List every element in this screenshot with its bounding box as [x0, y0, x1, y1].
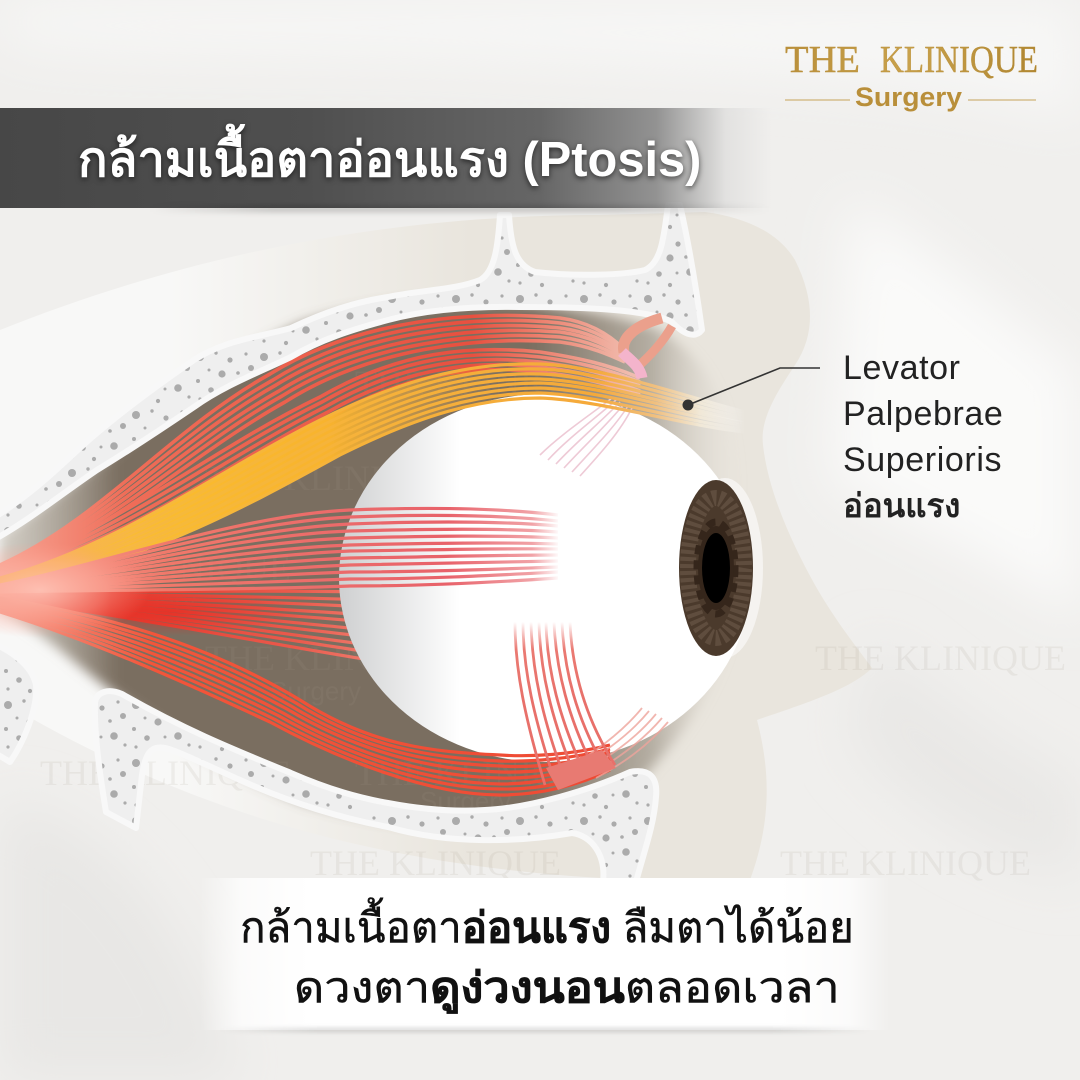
label: levator palpebrae superioris: Superioris — [843, 441, 1002, 479]
faint watermarks: Surgery — [420, 786, 511, 816]
caption text — [240, 897, 854, 1014]
faint watermarks: Surgery — [270, 676, 361, 706]
faint watermarks: THE KLINIQUE — [355, 753, 606, 793]
eyeball — [339, 394, 763, 762]
faint watermarks: THE KLINIQUE — [205, 458, 456, 498]
title: กล้ามเนื้อตาอ่อนแรง (Ptosis) — [78, 133, 701, 187]
faint watermarks: THE KLINIQUE — [40, 753, 291, 793]
logo: THE — [785, 39, 860, 81]
muscle: lower rectus behind the eye — [0, 591, 370, 660]
pupil — [702, 533, 730, 603]
logo: Surgery — [855, 82, 962, 112]
label: levator palpebrae superioris: Palpebrae — [843, 395, 1003, 433]
glow at muscle origin — [0, 542, 150, 638]
logo — [785, 39, 1038, 112]
faint watermarks: THE KLINIQUE — [310, 843, 561, 883]
faint watermarks — [40, 363, 1066, 883]
label: levator palpebrae superioris: Levator — [843, 349, 961, 387]
muscle: second superior band — [0, 350, 640, 578]
logo: KLINIQUE — [880, 39, 1038, 81]
faint retracted fibres — [540, 398, 632, 476]
lower orbital bone left fragment — [0, 642, 36, 762]
muscle: inferior oblique on the eye — [515, 622, 668, 790]
eye socket shadow — [0, 301, 745, 825]
faint watermarks: THE KLINIQUE — [780, 843, 1031, 883]
iris — [679, 480, 753, 656]
faint watermarks: THE KLINIQUE — [355, 363, 606, 403]
muscle: inferior rectus — [0, 598, 610, 795]
red glow at muscle origin — [40, 588, 300, 636]
face silhouette — [0, 212, 872, 880]
label: levator palpebrae superioris: อ่อนแรง — [843, 487, 960, 524]
upper orbital bone — [0, 205, 702, 542]
faint watermarks: THE KLINIQUE — [205, 638, 456, 678]
leader line — [682, 368, 820, 410]
trochlea loop — [622, 318, 672, 378]
title band — [0, 108, 772, 208]
faint watermarks: Surgery — [105, 586, 196, 616]
lower orbital bone — [95, 691, 656, 882]
faint watermarks: THE KLINIQUE — [815, 638, 1066, 678]
label: levator palpebrae superioris — [843, 349, 1003, 524]
caption text: กล้ามเนื้อตาอ่อนแรง ลืมตาได้น้อย — [240, 904, 854, 951]
caption background — [200, 878, 890, 1030]
muscle: levator palpebrae (yellow) — [0, 364, 745, 585]
muscle: superior upper band — [0, 315, 625, 572]
caption text: ดวงตาดูง่วงนอนตลอดเวลา — [294, 964, 840, 1011]
faint watermarks: THE KLINIQUE — [40, 548, 291, 588]
muscle: medial rectus across the eye — [0, 508, 558, 592]
